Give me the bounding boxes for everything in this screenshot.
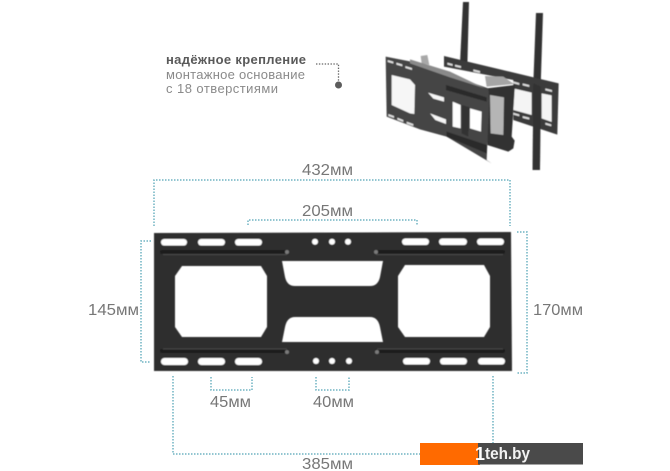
- dimension: 432 mm overall width: 432мм: [302, 162, 353, 179]
- callout: secure mounting text: [166, 52, 306, 96]
- callout: secure mounting text: надёжное крепление: [166, 52, 306, 67]
- dimension: 205 mm: [248, 203, 417, 225]
- watermark logo: 1teh.by: [420, 443, 583, 465]
- swing arm: [421, 55, 515, 152]
- dimension: 432 mm overall width: [154, 162, 510, 226]
- dimension: 170 mm: 170мм: [533, 302, 583, 319]
- back plate: [444, 56, 559, 170]
- front plate: [386, 57, 492, 163]
- dimension: 145 mm: [88, 241, 151, 362]
- dimension: 40 mm: 40мм: [313, 394, 354, 411]
- watermark logo: 1teh.by: 1: [475, 444, 485, 464]
- dimension: 45 mm: 45мм: [210, 394, 251, 411]
- grooves and rivets: [162, 250, 503, 354]
- dimension: 205 mm: 205мм: [302, 203, 353, 220]
- callout leader line with dot: [316, 64, 342, 88]
- dimension: 45 mm: [210, 377, 252, 411]
- dimension: 385 mm: [173, 376, 493, 471]
- dimension: 170 mm: [517, 232, 583, 373]
- product photo: articulated TV wall mount: [386, 2, 559, 170]
- dimension: 145 mm: 145мм: [88, 302, 139, 319]
- mounting slots: [161, 238, 505, 365]
- watermark logo: 1teh.by: teh.by: [485, 444, 530, 463]
- centre holes: [312, 239, 352, 364]
- back plate rails: [460, 2, 543, 170]
- callout: secure mounting text: монтажное основание: [166, 67, 305, 82]
- callout: secure mounting text: с 18 отверстиями: [166, 81, 278, 96]
- dimension: 40 mm: [313, 377, 354, 411]
- mounting plate: [154, 232, 512, 371]
